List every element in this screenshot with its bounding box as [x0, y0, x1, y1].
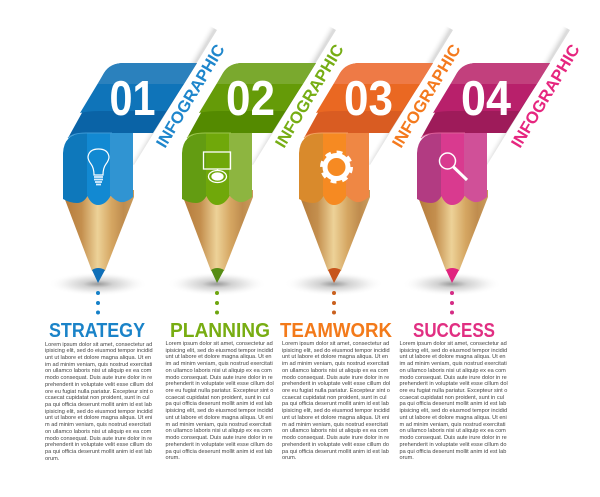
text block: teamwork: prehenderit in voluptate velit esse cillum do [282, 442, 389, 448]
text block: strategy: Lorem ipsum dolor sit amet, consectetur ad [45, 342, 152, 348]
pencil shadow [284, 272, 384, 296]
infographic label: INFOGRAPHIC [153, 41, 229, 151]
icon: monitor [204, 152, 230, 182]
text block: success: ipisicing elit, sed do eiusmod tempor incidid [400, 348, 507, 354]
diagonal fold shadow [125, 25, 217, 165]
pencil barrel [63, 133, 133, 205]
text block: strategy: im ad minim veniam, quis nostrud exercitati [45, 362, 152, 368]
text block: planning [166, 341, 274, 461]
pencil barrel [182, 133, 252, 205]
dots [215, 291, 219, 314]
text block: planning: m ad minim veniam, quis nostrud exercitati [166, 422, 272, 428]
text block: teamwork [282, 341, 390, 461]
text block: teamwork: modo consequat. Duis aute irure dolor in re [282, 375, 389, 381]
text block: teamwork: im ad minim veniam, quis nostrud exercitati [282, 361, 389, 367]
pencil shadow [167, 272, 267, 296]
text block: planning: ore eu fugiat nulla pariatur. Excepteur sint o [166, 388, 273, 394]
text block: strategy: unt ut labore et dolore magna aliqua. Ut en [45, 355, 151, 361]
text block: planning: pa qui officia deserunt mollit anim id est lab [166, 401, 272, 407]
number: 02 [226, 72, 275, 126]
text block: success: pa qui officia deserunt mollit anim id est lab [400, 401, 506, 407]
icon: magnifier [440, 153, 467, 180]
lead tip [92, 268, 105, 283]
text block: teamwork: Lorem ipsum dolor sit amet, consectetur ad [282, 341, 389, 347]
ribbon [68, 63, 197, 138]
lead tip [211, 268, 224, 283]
ribbon [421, 63, 550, 138]
infographic label: INFOGRAPHIC [389, 41, 465, 151]
text block: success: ccaecat cupidatat non proident, sunt in cul [400, 395, 504, 401]
infographic label: INFOGRAPHIC [272, 41, 348, 151]
text block: success: modo consequat. Duis aute irure dolor in re [400, 375, 507, 381]
wood cone [183, 190, 253, 271]
text block: teamwork: on ullamco laboris nisi ut aliquip ex ea com [282, 368, 388, 374]
text block: planning: prehenderit in voluptate velit esse cillum do [166, 442, 272, 448]
text block: strategy: ipisicing elit, sed do eiusmod tempor incidid [45, 348, 153, 354]
text block: strategy: pa qui officia deserunt mollit anim id est lab [45, 402, 152, 408]
text block: strategy: modo consequat. Duis aute irure dolor in re [45, 375, 152, 381]
diagonal fold shadow [244, 25, 336, 165]
text block: strategy: ore eu fugiat nulla pariatur. Excepteur sint o [45, 389, 153, 395]
text block: strategy: m ad minim veniam, quis nostrud exercitati [45, 422, 151, 428]
text block: planning: prehenderit in voluptate velit esse cillum dol [166, 381, 274, 387]
dots [96, 291, 100, 314]
heading: success: SUCCESS [413, 319, 495, 342]
text block: success: pa qui officia deserunt mollit anim id est lab [400, 448, 506, 454]
number: 03 [344, 72, 393, 126]
text block: planning: Lorem ipsum dolor sit amet, consectetur ad [166, 341, 273, 347]
text block: success: Lorem ipsum dolor sit amet, consectetur ad [400, 341, 507, 347]
text block: success: ore eu fugiat nulla pariatur. Excepteur sint o [400, 388, 507, 394]
text block: strategy: ipisicing elit, sed do eiusmod tempor incidid [45, 409, 153, 415]
text block: planning: im ad minim veniam, quis nostrud exercitati [166, 361, 273, 367]
text block: success: prehenderit in voluptate velit esse cillum dol [400, 381, 508, 387]
dots [450, 291, 454, 314]
text block: planning: on ullamco laboris nisi ut aliquip ex ea com [166, 428, 272, 434]
text block: teamwork: on ullamco laboris nisi ut aliquip ex ea com [282, 428, 388, 434]
text block: strategy: prehenderit in voluptate velit esse cillum dol [45, 382, 153, 388]
pencil 4: success [402, 25, 584, 314]
text block: planning: orum. [166, 455, 180, 461]
infographic label: INFOGRAPHIC [508, 41, 584, 151]
icon: light bulb [88, 149, 109, 184]
text block: teamwork: unt ut labore et dolore magna aliqua. Ut en [282, 354, 388, 360]
text block: success: on ullamco laboris nisi ut aliquip ex ea com [400, 428, 506, 434]
text block: teamwork: orum. [282, 455, 296, 461]
text block: success: prehenderit in voluptate velit esse cillum do [400, 442, 506, 448]
text block: teamwork: m ad minim veniam, quis nostrud exercitati [282, 422, 388, 428]
text block: success: unt ut labore et dolore magna aliqua. Ut en [400, 354, 506, 360]
text block: teamwork: prehenderit in voluptate velit esse cillum dol [282, 381, 390, 387]
text block: planning: unt ut labore et dolore magna aliqua. Ut en [166, 354, 272, 360]
text block: success: modo consequat. Duis aute irure dolor in re [400, 435, 507, 441]
ribbon [304, 63, 433, 138]
diagonal fold shadow [361, 25, 453, 165]
pencil barrel [417, 133, 487, 205]
number: 04 [461, 72, 511, 126]
text block: success: m ad minim veniam, quis nostrud exercitati [400, 422, 506, 428]
text block: success: ipisicing elit, sed do eiusmod tempor incidid [400, 408, 507, 414]
text block: strategy: pa qui officia deserunt mollit anim id est lab [45, 449, 152, 455]
text block: strategy: orum. [45, 456, 59, 462]
pencil shadow [48, 272, 148, 296]
lead tip [328, 268, 341, 283]
text block: planning: pa qui officia deserunt mollit anim id est lab [166, 448, 272, 454]
wood cone [64, 190, 134, 271]
text block: teamwork: ore eu fugiat nulla pariatur. Excepteur sint o [282, 388, 390, 394]
number: 01 [110, 72, 156, 126]
text block: planning: ccaecat cupidatat non proident, sunt in cul [166, 395, 270, 401]
heading: planning: PLANNING [170, 319, 270, 342]
text block: planning: modo consequat. Duis aute irure dolor in re [166, 375, 273, 381]
text block: strategy: unt ut labore et dolore magna aliqua. Ut eni [45, 415, 152, 421]
wood cone [300, 190, 370, 271]
ribbon [187, 63, 316, 138]
text block: success: unt ut labore et dolore magna aliqua. Ut eni [400, 415, 507, 421]
heading: teamwork: TEAMWORK [280, 319, 392, 342]
diagonal fold shadow [478, 25, 570, 165]
wood cone [418, 190, 488, 271]
lead tip [446, 268, 459, 283]
heading: strategy: STRATEGY [49, 319, 145, 342]
text block: strategy: prehenderit in voluptate velit esse cillum do [45, 442, 152, 448]
pencil 1: strategy [48, 25, 229, 314]
text block: strategy: modo consequat. Duis aute irure dolor in re [45, 436, 152, 442]
text block: teamwork: pa qui officia deserunt mollit anim id est lab [282, 401, 389, 407]
text block: success: on ullamco laboris nisi ut aliquip ex ea com [400, 368, 506, 374]
pencil 3: teamwork [284, 25, 465, 314]
text block: strategy [45, 342, 153, 462]
text block: strategy: ccaecat cupidatat non proident, sunt in cul [45, 395, 149, 401]
text block: success: im ad minim veniam, quis nostrud exercitati [400, 361, 507, 367]
text block: success: orum. [400, 455, 414, 461]
text block: teamwork: pa qui officia deserunt mollit anim id est lab [282, 448, 389, 454]
dots [332, 291, 336, 314]
text block: planning: modo consequat. Duis aute irure dolor in re [166, 435, 273, 441]
pencil shadow [402, 272, 502, 296]
text block: strategy: on ullamco laboris nisi ut aliquip ex ea com [45, 429, 151, 435]
pencil barrel [299, 133, 369, 205]
text block: planning: on ullamco laboris nisi ut aliquip ex ea com [166, 368, 272, 374]
text block: teamwork: ipisicing elit, sed do eiusmod tempor incidid [282, 348, 390, 354]
pencil 2: planning [167, 25, 348, 314]
text block: teamwork: modo consequat. Duis aute irure dolor in re [282, 435, 389, 441]
text block: planning: ipisicing elit, sed do eiusmod tempor incidid [166, 408, 273, 414]
text block: teamwork: ipisicing elit, sed do eiusmod tempor incidid [282, 408, 390, 414]
text block: teamwork: unt ut labore et dolore magna aliqua. Ut eni [282, 415, 389, 421]
icon: gear [322, 152, 351, 182]
text block: planning: unt ut labore et dolore magna aliqua. Ut eni [166, 415, 273, 421]
text block: planning: ipisicing elit, sed do eiusmod tempor incidid [166, 348, 273, 354]
text block: teamwork: ccaecat cupidatat non proident, sunt in cul [282, 395, 386, 401]
text block: strategy: on ullamco laboris nisi ut aliquip ex ea com [45, 368, 151, 374]
text block: success [400, 341, 508, 461]
